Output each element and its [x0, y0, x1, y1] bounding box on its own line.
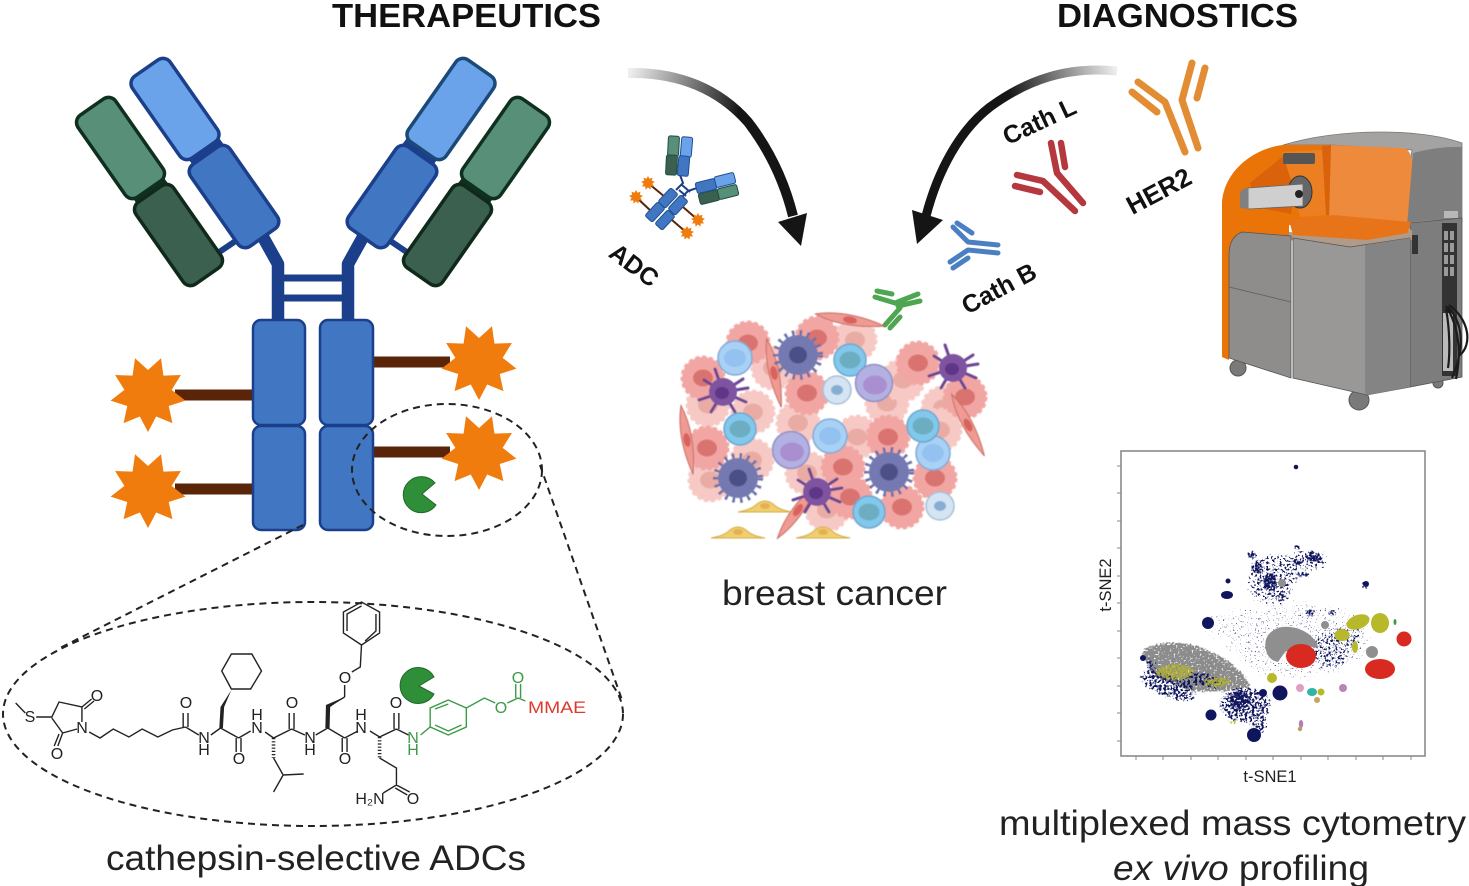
- ion source ring: [1288, 176, 1312, 208]
- label: HER2: HER2: [1121, 162, 1196, 221]
- red clusters: [1286, 632, 1412, 679]
- atom labels: O: [91, 688, 103, 705]
- yellow adipocytes: [711, 501, 850, 538]
- atom labels: O: [286, 695, 298, 712]
- orange window panel: [1329, 145, 1412, 226]
- atom labels: O: [51, 746, 63, 763]
- green linker bonds: [421, 684, 525, 735]
- linkers: [175, 362, 450, 489]
- atom labels: H: [251, 707, 263, 724]
- antibody: green: [875, 291, 920, 328]
- plot frame and ticks: [1117, 451, 1425, 760]
- black bonds: [16, 602, 525, 795]
- right lower panel: [1410, 218, 1462, 387]
- front panel: [1293, 238, 1410, 395]
- Fc domains: [253, 320, 373, 530]
- indigo spiky cells: [716, 333, 911, 500]
- atom labels: N: [198, 730, 210, 747]
- chemical structure: [16, 602, 586, 808]
- icon: cathepsin pacman: [403, 477, 436, 513]
- green atom labels: H: [407, 742, 419, 759]
- atom labels: [25, 670, 419, 808]
- atom labels: O: [407, 791, 419, 808]
- olive speckled populations: [1155, 663, 1239, 725]
- orange dark strip: [1322, 145, 1333, 215]
- antibody: HER2 orange: [1132, 63, 1205, 152]
- label: breast cancer: breast cancer: [722, 574, 947, 613]
- immune lymphocytes: [718, 341, 954, 528]
- wedge bonds: [219, 690, 231, 728]
- gray population band: [1141, 642, 1252, 692]
- arrow: ADC to tumour: [628, 73, 807, 246]
- green atom labels: O: [495, 700, 507, 717]
- orange frame: [1222, 145, 1332, 360]
- atom labels: H: [198, 742, 210, 759]
- small ADC icon: [629, 136, 739, 240]
- right arm domains: [344, 55, 553, 289]
- orange shelf: [1289, 215, 1411, 240]
- atom labels: H: [355, 707, 367, 724]
- navy scattered populations: [1228, 543, 1369, 710]
- atom labels: H₂N: [355, 791, 385, 808]
- hinge and connectors: [212, 237, 414, 322]
- drug payload stars: [101, 314, 527, 536]
- atom labels: O: [339, 670, 351, 687]
- mass cytometer instrument: [1222, 132, 1467, 410]
- tumour microenvironment cell cluster: [676, 309, 989, 541]
- atom labels: O: [180, 695, 192, 712]
- minor populations: [1296, 619, 1396, 731]
- MMAE label: MMAE: [528, 698, 586, 717]
- right upper panel: [1407, 147, 1462, 222]
- antibody: Cath L red: [1015, 143, 1083, 211]
- atom labels: O: [390, 695, 402, 712]
- arrow: antibodies to tumour: [912, 70, 1117, 244]
- label: Cath L: Cath L: [998, 93, 1081, 151]
- atom labels: N: [355, 720, 367, 737]
- top cap: [1283, 132, 1462, 222]
- label: multiplexed mass cytometry: multiplexed mass cytometry: [999, 804, 1467, 843]
- dark tumour cells: [682, 317, 986, 528]
- label: cathepsin-selective ADCs: cathepsin-selective ADCs: [106, 839, 526, 878]
- label: Cath B: Cath B: [957, 258, 1041, 320]
- green atom labels: N: [407, 730, 419, 747]
- orange recess: [1250, 157, 1297, 214]
- antibody: Cath B blue: [950, 223, 998, 268]
- olive dense clusters: [1267, 611, 1389, 683]
- green atom labels: [407, 670, 524, 759]
- cables: [1446, 305, 1467, 379]
- atom labels: N: [304, 730, 316, 747]
- purple dendritic cells: [699, 345, 978, 512]
- inter-domain joints: [137, 142, 489, 204]
- zoom callout dashed ellipses: [3, 404, 623, 826]
- ion source cylinder: [1240, 184, 1303, 209]
- left gray door: [1229, 232, 1291, 378]
- spindle fibroblasts: [676, 309, 989, 541]
- axis label: t-SNE1: t-SNE1: [1243, 768, 1297, 786]
- orange inner panel: [1282, 150, 1327, 217]
- display slot: [1283, 153, 1315, 164]
- t-SNE scatter plot: [1097, 451, 1425, 786]
- atom labels: H: [304, 742, 316, 759]
- large antibody-drug conjugate: [73, 55, 553, 536]
- left arm domains: [73, 55, 282, 289]
- label: ADC: ADC: [604, 238, 664, 293]
- under-shelf strip: [1289, 230, 1412, 248]
- wheels: [1230, 360, 1443, 410]
- gray dense clusters: [1265, 579, 1378, 662]
- sparse background scatter: [1190, 588, 1385, 692]
- atom labels: O: [339, 751, 351, 768]
- axis label: t-SNE2: t-SNE2: [1097, 558, 1115, 612]
- atom labels: S: [25, 709, 35, 726]
- light tumour cells: [687, 319, 964, 531]
- atom labels: N: [76, 720, 88, 737]
- atom labels: O: [233, 751, 245, 768]
- hashed bonds: [274, 737, 380, 758]
- navy mixed lower populations: [1133, 655, 1273, 735]
- navy dense clusters: [1140, 465, 1369, 742]
- atom labels: N: [251, 720, 263, 737]
- icon: cathepsin pacman: [400, 668, 434, 703]
- rear ports: [1442, 211, 1458, 376]
- green atom labels: O: [512, 670, 524, 687]
- navy sparse upper scatter: [1242, 544, 1368, 675]
